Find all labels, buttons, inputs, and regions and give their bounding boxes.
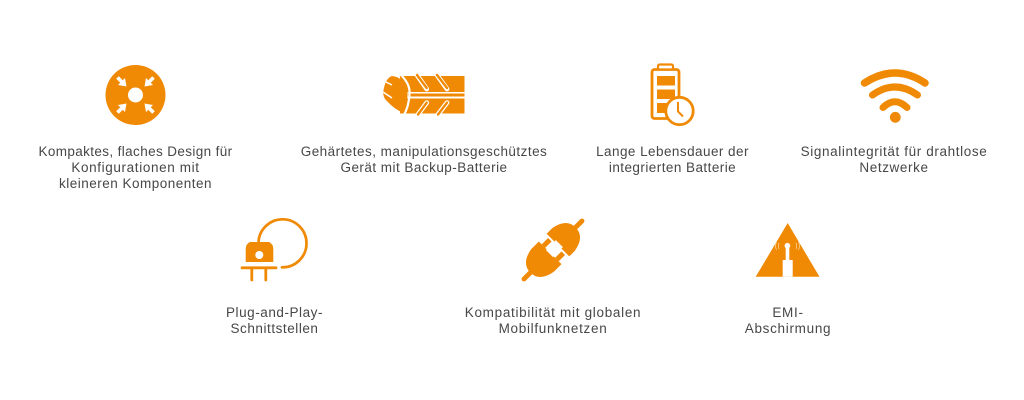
icon: connected plugs [513,210,593,290]
text: compatibility: Mobilfunknetzen [499,321,607,336]
icon: battery with clock [652,64,693,125]
text: battery life: integrierten Batterie [609,160,736,174]
text: EMI shielding: Abschirmung [745,321,831,336]
text: plug and play [226,305,323,336]
text: compact design: kleineren Komponenten [59,176,212,190]
text: compact design: Kompaktes, flaches Design für [38,144,233,158]
text: signal integrity [801,144,987,174]
icon: plug and play [242,219,306,280]
text: hardened device: Gehärtetes, manipulationsgeschütztes [301,144,547,158]
icon: wifi signal [864,73,925,123]
text: compatibility: Kompatibilität mit globalen [465,305,641,320]
text: plug and play: Schnittstellen [230,321,318,336]
text: compact design [38,144,233,191]
text: hardened device [301,144,547,175]
text: plug and play: Plug-and-Play- [226,305,323,320]
text: signal integrity: Netzwerke [859,160,929,174]
text: signal integrity: Signalintegrität für drahtlose [801,144,987,158]
text: compatibility [465,305,641,336]
text: battery life [596,144,749,175]
text: compact design: Konfigurationen mit [71,160,200,174]
text: EMI shielding: EMI- [772,305,804,320]
icon: hardened device [383,74,464,116]
text: battery life: Lange Lebensdauer der [596,144,749,158]
text: EMI shielding [744,305,831,336]
icon: EMI shielding [756,223,820,277]
text: hardened device: Gerät mit Backup-Batterie [340,160,508,174]
icon: compact design [106,65,166,125]
